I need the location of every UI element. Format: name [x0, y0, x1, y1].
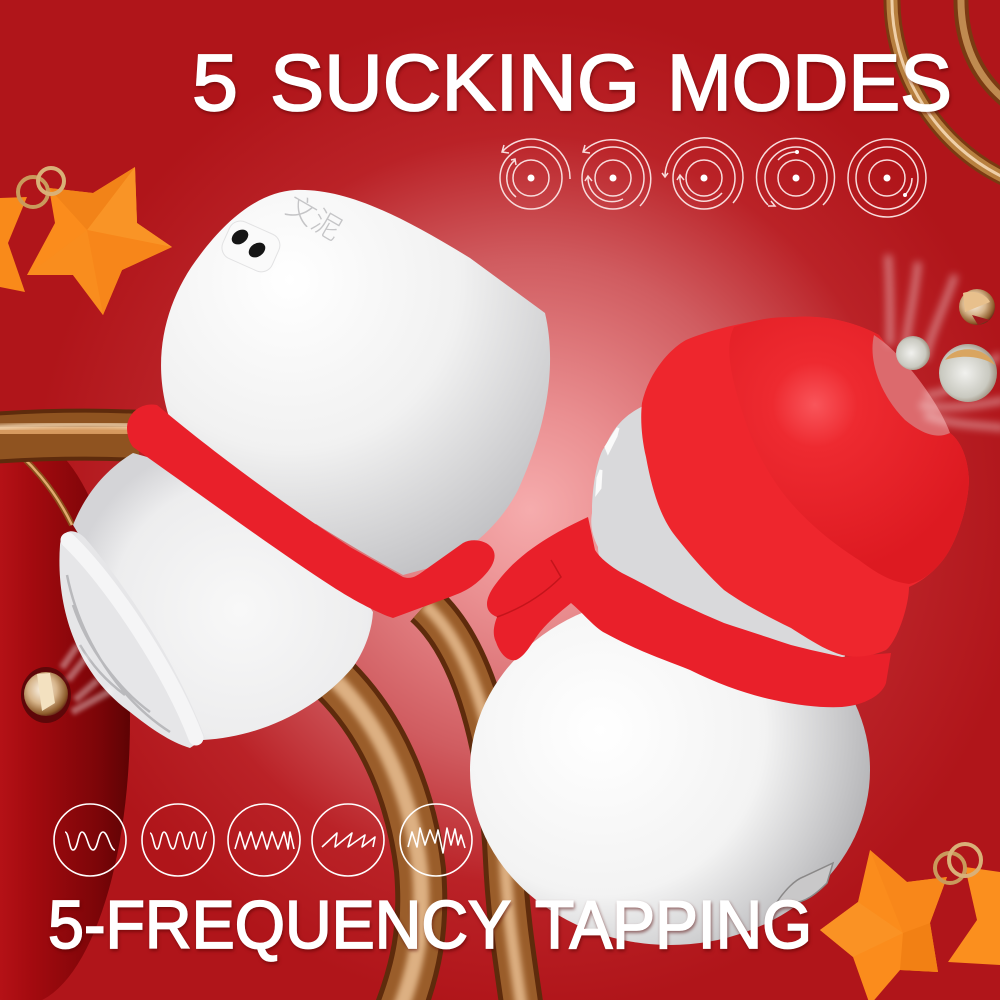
frequency icon 1	[54, 804, 126, 876]
right toy: red scarf	[487, 517, 891, 707]
left toy: logo text: 文泥	[280, 189, 347, 247]
mouth opening and air stream	[872, 255, 1000, 436]
ball on left nozzle	[24, 645, 112, 716]
left toy: eyes	[218, 217, 284, 276]
frequency icon 5	[400, 804, 472, 876]
right toy: body	[470, 595, 870, 945]
gold ring lower arc	[335, 680, 421, 1000]
title: frequency tapping: 5-FREQUENCY	[48, 887, 510, 963]
star bottom right	[820, 844, 1000, 1000]
left toy: body	[73, 453, 373, 740]
right toy	[470, 317, 969, 945]
right toy: bottom button	[777, 863, 833, 903]
title: sucking modes: SUCKING	[270, 38, 640, 127]
gold arc on left disc	[0, 438, 72, 525]
frequency icon 4	[312, 804, 384, 876]
right toy: red hat	[641, 317, 969, 657]
frequency icon 3	[228, 804, 300, 876]
mode icon 2	[582, 140, 651, 209]
gold ring upper left band	[0, 425, 140, 438]
right toy: side buttons	[597, 428, 618, 492]
mode icon 1	[500, 139, 570, 209]
rotation mode icons	[500, 138, 926, 217]
mode icon 4	[756, 138, 834, 209]
gold ring middle arc	[425, 605, 522, 1000]
title: sucking modes: 5	[192, 38, 238, 127]
frequency icon 2	[142, 804, 214, 876]
left toy: head	[161, 190, 550, 575]
left toy	[59, 189, 550, 748]
mode icon 5	[848, 139, 926, 217]
gold rings top right	[892, 0, 1000, 178]
star top left	[0, 167, 172, 315]
socket behind left ball	[21, 667, 71, 723]
title: sucking modes: MODES	[667, 38, 952, 127]
frequency icons	[54, 804, 472, 876]
dark red disc left	[0, 435, 130, 1000]
right toy: head	[591, 405, 850, 665]
title: frequency tapping: TAPPING	[535, 887, 812, 963]
left toy: ridged nozzle	[59, 531, 205, 748]
left toy: red scarf	[127, 404, 495, 618]
mode icon 3	[662, 138, 743, 209]
